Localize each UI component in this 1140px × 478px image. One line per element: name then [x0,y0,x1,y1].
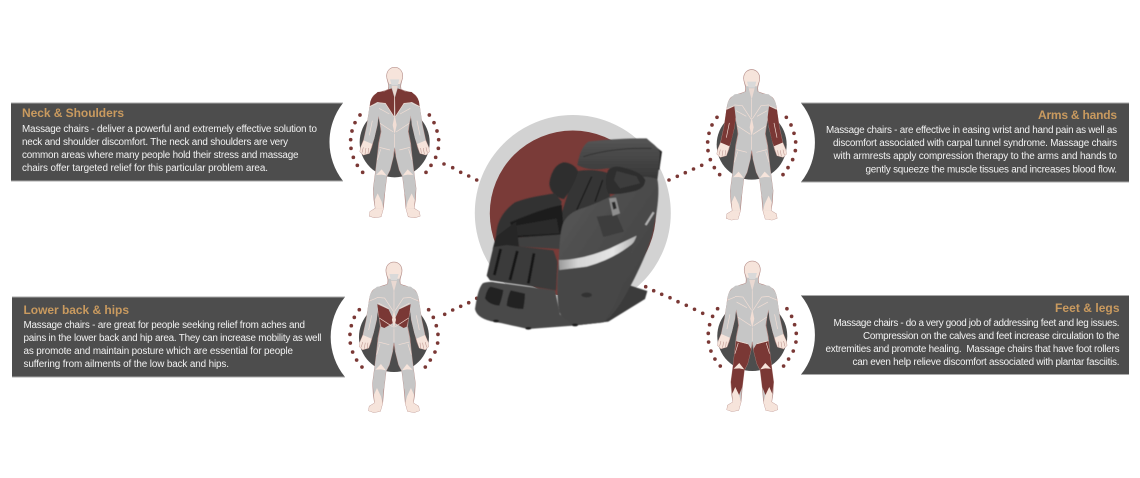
heading: neck and shoulders: Neck & Shoulders [22,106,124,120]
text: feet and legs description: can even help relieve discomfort associated with plantar fasciitis. [852,357,1120,368]
heading: feet and legs: Feet & legs [1055,301,1120,315]
text: feet and legs description: extremities and promote healing. Massage chairs that have foot rollers [826,344,1120,355]
text: feet and legs description: Massage chairs - do a very good job of addressing feet and leg issues. [834,318,1120,329]
heading: arms and hands: Arms & hands [1038,108,1117,122]
text: neck and shoulders description: neck and shoulder discomfort. The neck and shoulders are very [22,137,288,148]
text: neck and shoulders description [22,124,318,174]
text: feet and legs description: Compression on the calves and feet increase circulation to the [863,331,1120,342]
massage chair [475,138,662,330]
text: lower back and hips description: Massage chairs - are great for people seeking relief from aches and [24,320,305,331]
text: lower back and hips description: as promote and maintain posture which are essential for people [24,346,294,357]
dotted connector: neck and shoulders [442,162,479,182]
text: feet and legs description [826,318,1120,368]
dotted connector: lower back and hips [443,296,479,316]
text: neck and shoulders description: chairs offer targeted relief for this particular problem area. [22,163,268,174]
text: lower back and hips description [24,320,322,370]
figure: arms and hands highlighted [706,70,797,220]
text: arms and hands description [826,125,1118,176]
text: lower back and hips description: suffering from ailments of the low back and hips. [24,359,229,370]
figure: neck and shoulders highlighted [349,67,440,218]
text: arms and hands description: with armrests apply compression therapy to the arms and hands to [832,151,1118,162]
figure: feet and legs highlighted [706,261,798,411]
text: arms and hands description: gently squeeze the muscle tissues and increases blood flow. [866,164,1117,176]
panel: lower back and hips [12,297,345,377]
heading: lower back and hips: Lower back & hips [24,303,129,317]
text: neck and shoulders description: Massage chairs - deliver a powerful and extremely effective solution to [22,124,318,135]
text: neck and shoulders description: common areas where many people hold their stress and massage [22,150,299,161]
panel: feet and legs [801,296,1129,374]
text: arms and hands description: Massage chairs - are effective in easing wrist and hand pain as well as [826,125,1117,136]
dotted connector: feet and legs [644,285,704,315]
text: arms and hands description: discomfort associated with carpal tunnel syndrome. Massage chairs [833,138,1117,149]
central backdrop circles [475,115,671,311]
text: lower back and hips description: pains in the lower back and hip area. They can increase mobility as well [24,333,322,344]
dotted connector: arms and hands [667,164,704,182]
figure: lower back and hips highlighted [348,262,440,412]
panel: arms and hands [801,103,1129,182]
panel: neck and shoulders [11,103,343,181]
